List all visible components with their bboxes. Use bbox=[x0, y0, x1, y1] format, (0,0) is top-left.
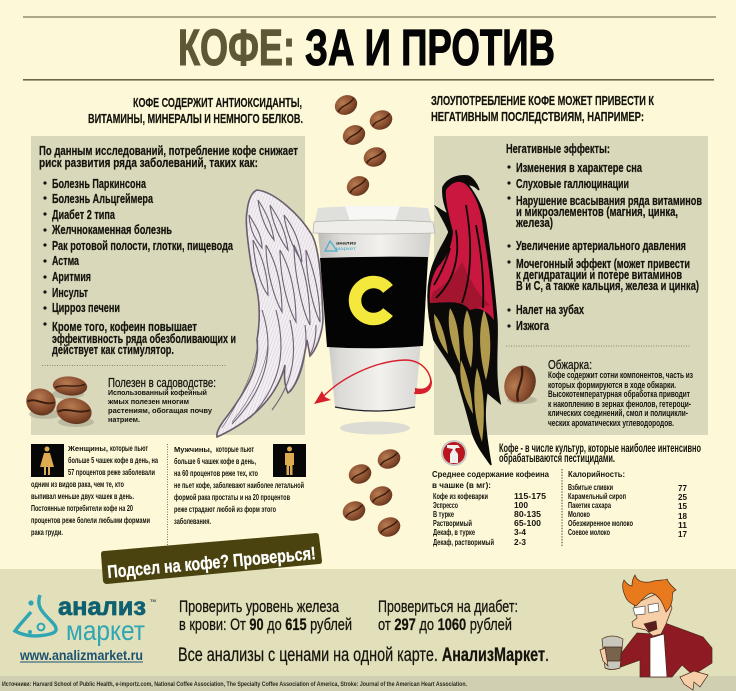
benefits text: Болезнь Паркинсона bbox=[52, 176, 147, 191]
logo bbox=[15, 593, 157, 663]
roasting note: клических соединений, смол и полицикли- bbox=[548, 408, 688, 418]
benefits text: Желчнокаменная болезнь bbox=[51, 222, 172, 237]
coffee cup bbox=[602, 636, 623, 670]
banner: Подсел на кофе? Проверься! bbox=[107, 543, 317, 582]
women note: процентов реже болели любыми формами bbox=[31, 516, 150, 525]
caffeine table: Кофе из кофеварки bbox=[433, 492, 488, 501]
women note bbox=[31, 444, 158, 537]
calories table: 77 bbox=[678, 483, 687, 493]
icon: bottom coffee beans bbox=[340, 446, 403, 540]
calories table: Карамельный сироп bbox=[568, 492, 626, 501]
women note: выпивал меньше двух чашек в день. bbox=[31, 492, 134, 501]
caffeine table: 2-3 bbox=[514, 537, 526, 547]
right heading: НЕГАТИВНЫМ ПОСЛЕДСТВИЯМ, НАПРИМЕР: bbox=[431, 109, 644, 124]
caffeine table: в чашке (в мг): bbox=[432, 480, 491, 490]
icon: man bbox=[273, 444, 306, 477]
caffeine table: Растворимый bbox=[433, 519, 472, 528]
sleeve letter C bbox=[355, 282, 388, 319]
women note: которые пьют bbox=[110, 444, 148, 453]
icon: woman bbox=[31, 444, 64, 477]
shirt bbox=[650, 634, 667, 677]
men note: не пьет кофе, заболевают наиболее летальной bbox=[174, 481, 304, 490]
panel: negative effects bbox=[434, 136, 708, 435]
logo: www.analizmarket.ru bbox=[19, 647, 143, 663]
women note: 57 процентов реже заболевали bbox=[68, 468, 155, 477]
calories table: 17 bbox=[678, 529, 687, 539]
negative effects text: Изжога bbox=[516, 318, 550, 333]
roasting note: Обжарка: bbox=[548, 357, 592, 372]
caffeine table: В турке bbox=[433, 510, 454, 519]
left heading: ВИТАМИНЫ, МИНЕРАЛЫ И НЕМНОГО БЕЛКОВ. bbox=[88, 111, 303, 126]
women note: одним из видов рака, чем те, кто bbox=[31, 480, 124, 489]
calories table: 18 bbox=[678, 511, 687, 521]
caffeine table: 100 bbox=[514, 500, 528, 510]
calories table: 11 bbox=[678, 520, 687, 530]
icon: devil wing bbox=[428, 176, 500, 465]
logo: TM bbox=[150, 598, 157, 603]
negative effects text: железа) bbox=[515, 215, 553, 230]
women note: Женщины, bbox=[67, 444, 108, 453]
negative effects text: Налет на зубах bbox=[516, 302, 585, 317]
glasses bbox=[633, 603, 659, 615]
calories table: Соевое молоко bbox=[568, 528, 610, 537]
roasting note: ческих ароматических углеводородов. bbox=[548, 418, 674, 428]
benefits text: риск развития ряда заболеваний, таких как: bbox=[39, 155, 258, 170]
jacket bbox=[618, 623, 712, 677]
men note: заболевания. bbox=[174, 517, 211, 526]
offer: iron: Проверить уровень железа bbox=[179, 597, 339, 616]
tagline: Все анализы с ценами на одной карте. АнализМаркет. bbox=[178, 645, 549, 666]
pesticide note: обрабатываются пестицидами. bbox=[499, 453, 615, 465]
benefits text: Аритмия bbox=[52, 269, 91, 284]
hair bbox=[623, 575, 676, 612]
title: ЗА И ПРОТИВ bbox=[305, 19, 555, 76]
cup logo: маркет bbox=[336, 246, 357, 251]
calories table: Молоко bbox=[568, 510, 590, 519]
illustration: Fry with coffee bbox=[600, 575, 712, 690]
caffeine table: 80-135 bbox=[514, 509, 541, 519]
cup logo: анализ bbox=[336, 240, 357, 246]
benefits text bbox=[39, 143, 298, 357]
gardening note: растениям, обогащая почву bbox=[108, 407, 212, 415]
panel: benefits bbox=[22, 136, 305, 435]
calories table bbox=[568, 469, 687, 539]
men note: которые пьют bbox=[216, 445, 254, 454]
women note: больше 5 чашек кофе в день, на bbox=[68, 456, 158, 465]
footer panel bbox=[0, 569, 736, 691]
negative effects text: Негативные эффекты: bbox=[506, 141, 610, 156]
benefits text: действует как стимулятор. bbox=[52, 342, 174, 357]
offer: iron bbox=[179, 597, 352, 634]
roasting note: к накоплению в зернах фенолов, гетероци- bbox=[548, 399, 691, 409]
benefits text: Диабет 2 типа bbox=[52, 207, 116, 222]
roasting note bbox=[548, 357, 693, 428]
gardening note bbox=[107, 375, 216, 424]
benefits text: По данным исследований, потребление кофе снижает bbox=[39, 143, 298, 158]
title: КОФЕ: bbox=[178, 19, 295, 76]
cup sleeve bbox=[320, 257, 428, 348]
benefits text: Рак ротовой полости, глотки, пищевода bbox=[52, 238, 234, 253]
gardening note: натрием. bbox=[108, 417, 140, 424]
benefits text: Кроме того, кофеин повышает bbox=[52, 319, 197, 334]
sources: Источники: Harvard School of Public Health, e-importz.com, National Coffee Association, The Specialty Coffee Association of America, Stroke: Journal of the American Heart Association. bbox=[2, 681, 467, 688]
icon: flask bbox=[15, 595, 56, 636]
gardening note: Использованный кофейный bbox=[108, 389, 207, 397]
benefits text: Инсульт bbox=[52, 285, 88, 300]
calories table: Пакетик сахара bbox=[568, 501, 611, 510]
negative effects text: и микроэлементов (магния, цинка, bbox=[516, 204, 678, 219]
head bbox=[632, 590, 672, 636]
calories table: Калорийность: bbox=[568, 469, 625, 479]
offer: diabetes: Проверитьcя на диабет: bbox=[378, 597, 518, 616]
left heading bbox=[88, 95, 303, 126]
pesticide note bbox=[441, 440, 701, 466]
arrow bbox=[314, 360, 432, 404]
benefits text: Астма bbox=[52, 253, 80, 268]
caffeine table: Среднее содержание кофеина bbox=[432, 469, 549, 479]
calories table: 15 bbox=[678, 501, 687, 511]
men note: больше 6 чашек кофе в день, bbox=[174, 457, 256, 466]
benefits text: Цирроз печени bbox=[52, 300, 120, 315]
caffeine table bbox=[432, 469, 549, 547]
calories table: 25 bbox=[678, 492, 687, 502]
men note: реже страдают любой из форм этого bbox=[174, 505, 276, 514]
women note: Постоянные потребители кофе на 20 bbox=[31, 504, 133, 513]
cup logo bbox=[325, 240, 357, 251]
caffeine table: 65-100 bbox=[514, 518, 541, 528]
gardening note: Полезен в садоводстве: bbox=[108, 375, 216, 390]
men note: на 60 процентов реже тех, кто bbox=[174, 469, 258, 478]
men note: Мужчины, bbox=[174, 445, 212, 454]
negative effects text bbox=[506, 141, 702, 333]
icon: spray bottle bbox=[441, 440, 467, 466]
left heading: КОФЕ СОДЕРЖИТ АНТИОКСИДАНТЫ, bbox=[133, 95, 302, 110]
caffeine table: Декаф, растворимый bbox=[433, 538, 494, 547]
right heading bbox=[431, 93, 654, 124]
calories table: Взбитые сливки bbox=[568, 483, 613, 492]
roasting note: которых формируются в ходе обжарки. bbox=[548, 380, 676, 390]
caffeine table: 115-175 bbox=[514, 491, 546, 501]
men note: формой рака простаты и на 20 процентов bbox=[174, 493, 290, 502]
offer: diabetes bbox=[378, 597, 518, 634]
negative effects text: Слуховые галлюцинации bbox=[516, 176, 629, 191]
illustration: coffee cup bbox=[313, 206, 435, 434]
offer: diabetes: от 297 до 1060 рублей bbox=[378, 615, 512, 634]
men note bbox=[174, 444, 306, 526]
calories table: Обезжиренное молоко bbox=[568, 519, 633, 528]
negative effects text: Изменения в характере сна bbox=[516, 160, 643, 175]
caffeine table: Эспрессо bbox=[433, 501, 458, 510]
offer: iron: в крови: От 90 до 615 рублей bbox=[179, 615, 352, 634]
caffeine table: 3-4 bbox=[514, 527, 526, 537]
icon: top coffee beans bbox=[332, 92, 395, 199]
women note: рака груди. bbox=[31, 528, 63, 537]
benefits text: эффективность ряда обезболивающих и bbox=[52, 331, 236, 346]
gardening note: жмых полезен многим bbox=[107, 399, 189, 406]
hand bbox=[680, 671, 708, 690]
logo: анализ bbox=[58, 593, 146, 621]
title bbox=[23, 16, 716, 81]
cup lid bbox=[313, 206, 435, 234]
benefits text: Болезнь Альцгеймера bbox=[52, 191, 154, 206]
caffeine table: Декаф, в турке bbox=[433, 528, 475, 537]
logo: маркет bbox=[66, 615, 145, 646]
mouth bbox=[644, 621, 657, 632]
icon: coffee beans bbox=[22, 375, 94, 427]
icon: roasted bean bbox=[499, 361, 541, 407]
icon: angel wing bbox=[217, 190, 323, 437]
